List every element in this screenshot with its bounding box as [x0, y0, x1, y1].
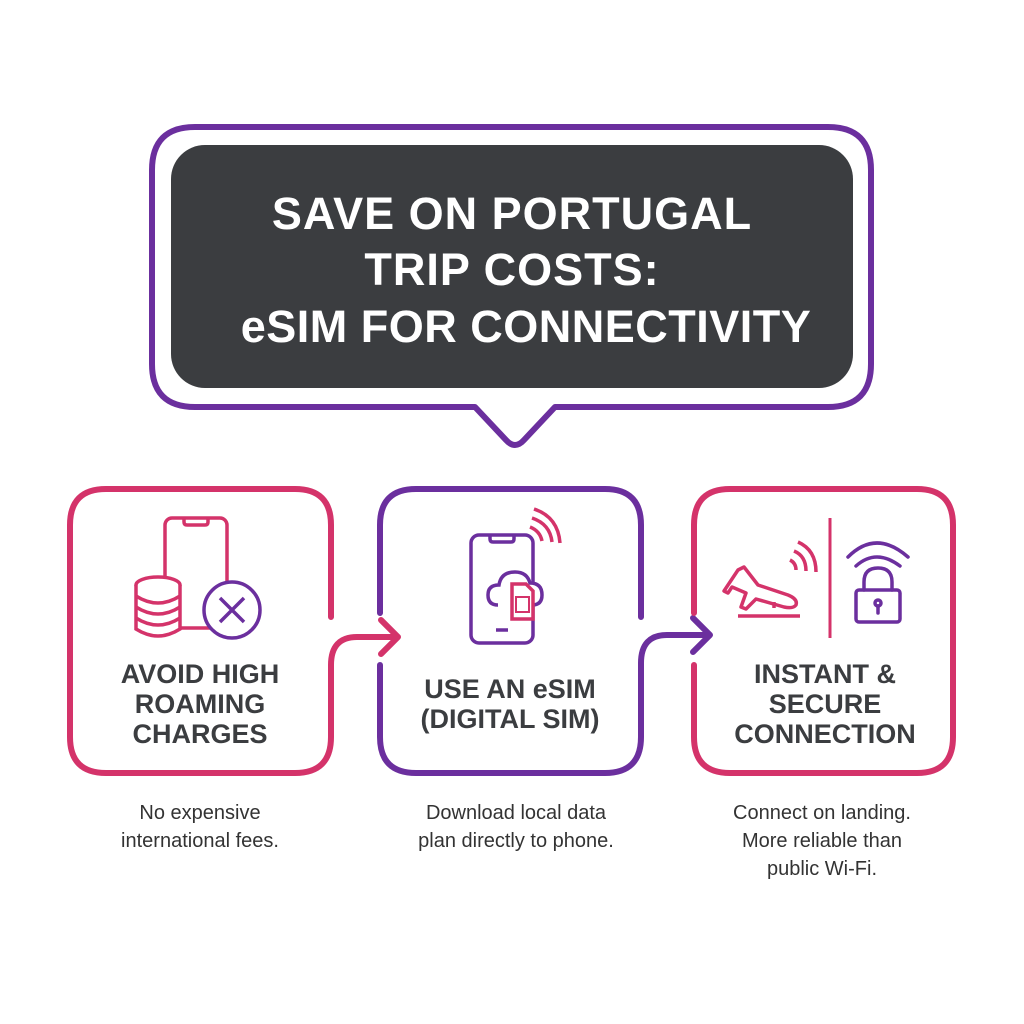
panel heading: [421, 674, 599, 734]
panel: use eSIM: [380, 489, 641, 773]
icon: phone with coins and X: [136, 518, 260, 638]
panel heading: AVOID HIGH: [121, 659, 279, 689]
description 3: More reliable than: [742, 830, 902, 852]
panel heading: ROAMING: [135, 689, 265, 719]
arrow 2: [641, 618, 710, 705]
description 2: plan directly to phone.: [418, 830, 614, 852]
description 2: Download local data: [426, 802, 607, 824]
panel heading: CONNECTION: [734, 719, 916, 749]
panel heading: INSTANT &: [754, 659, 896, 689]
panel heading: [121, 659, 279, 749]
title text: [241, 188, 811, 352]
description 1: international fees.: [121, 830, 279, 852]
icon: lock with wifi: [848, 543, 908, 622]
panel heading: USE AN eSIM: [424, 674, 596, 704]
panel heading: CHARGES: [132, 719, 268, 749]
description 3: [733, 802, 911, 880]
panel heading: (DIGITAL SIM): [421, 704, 599, 734]
panel: instant secure: [694, 489, 953, 773]
title text: SAVE ON PORTUGAL: [272, 188, 752, 239]
panel: avoid roaming: [70, 489, 331, 773]
arrow 1: [331, 620, 398, 705]
description 3: Connect on landing.: [733, 802, 911, 824]
icon: phone with cloud SIM: [471, 509, 560, 643]
description 3: public Wi-Fi.: [767, 858, 877, 880]
description 1: [121, 802, 279, 852]
panel heading: [734, 659, 916, 749]
icon: plane with signal: [724, 542, 816, 616]
title text: TRIP COSTS:: [364, 244, 660, 295]
panel heading: SECURE: [769, 689, 881, 719]
title text: eSIM FOR CONNECTIVITY: [241, 301, 811, 352]
description 2: [418, 802, 614, 852]
title bubble: [152, 127, 871, 445]
description 1: No expensive: [139, 802, 261, 824]
